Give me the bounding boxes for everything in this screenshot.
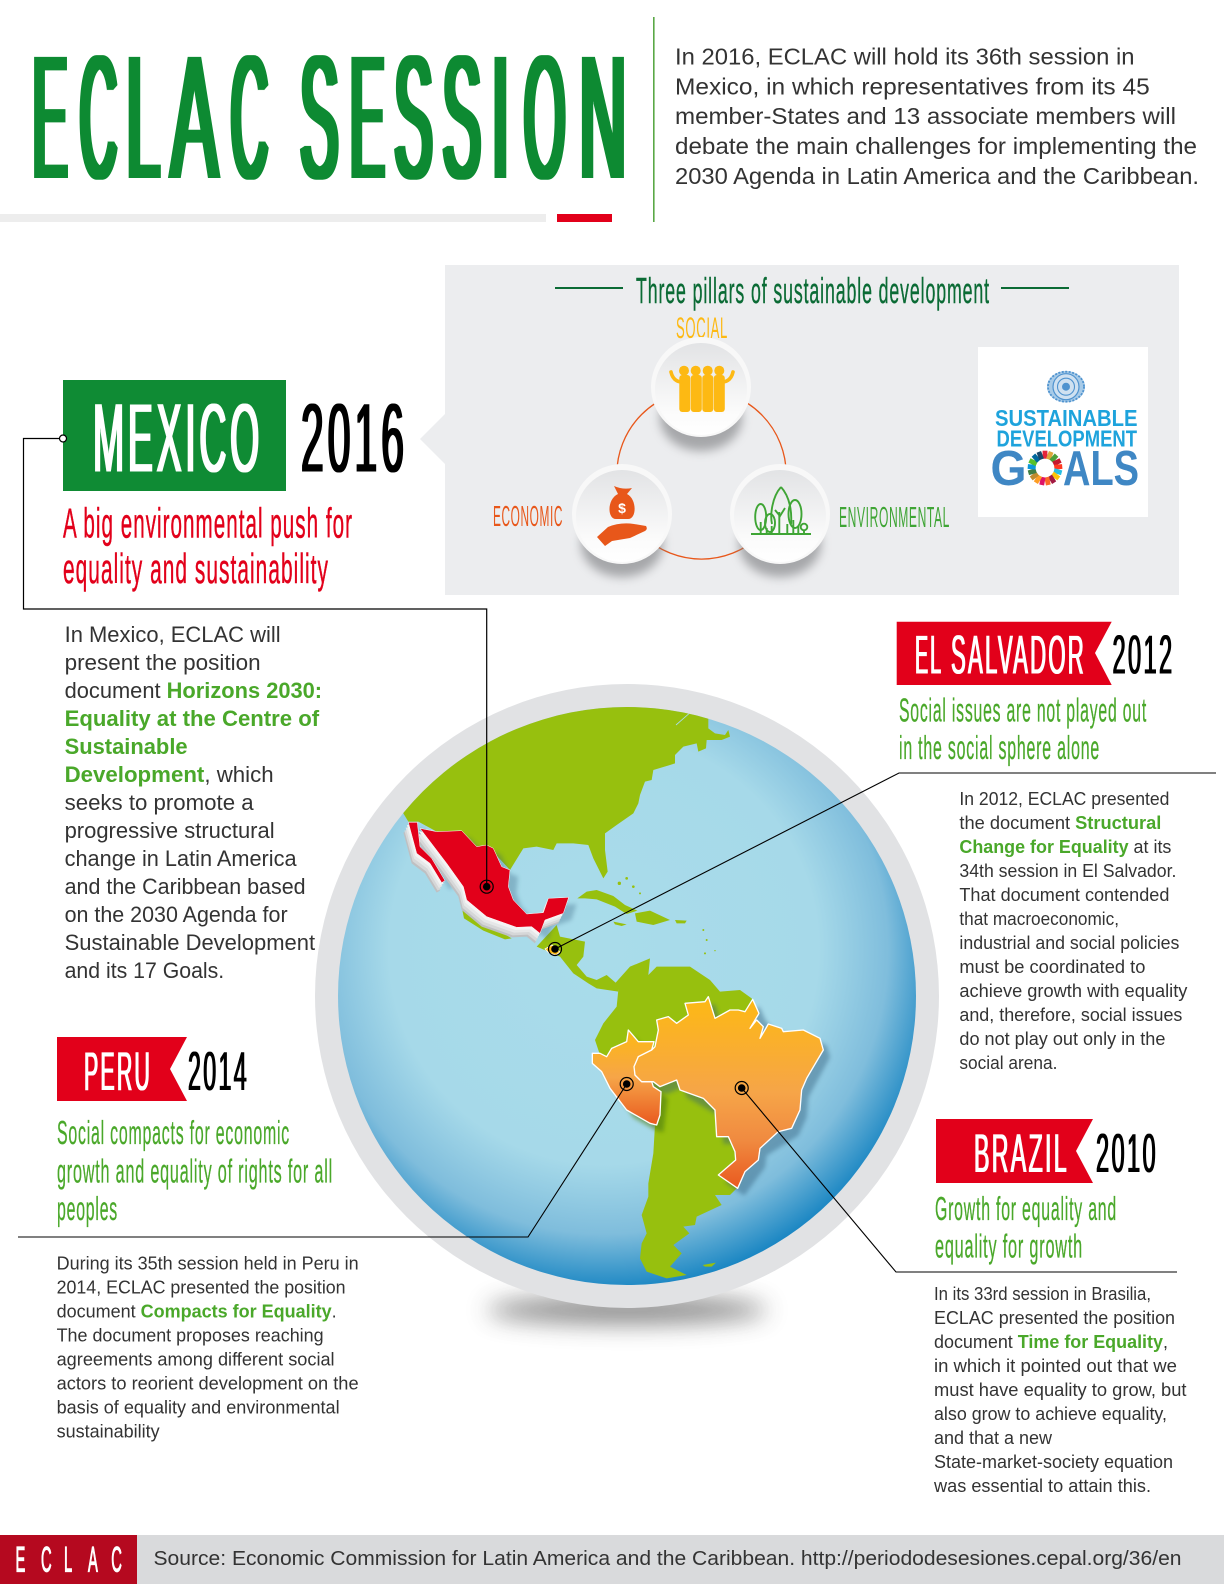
text: el salvador: must be coordinated to	[959, 957, 1145, 977]
text: el salvador: achieve growth with equality	[959, 981, 1187, 1001]
footer logo: ECLAC	[16, 1540, 122, 1580]
logo: sustainable development goals	[978, 347, 1148, 517]
intro text: debate the main challenges for implementing the	[675, 133, 1197, 159]
logo: sustainable development goals: G	[990, 442, 1026, 496]
footer	[0, 1535, 1224, 1584]
subheading: peru	[57, 1114, 333, 1227]
text: brazil: also grow to achieve equality,	[934, 1404, 1167, 1424]
map shadows	[642, 1004, 830, 1196]
text: el salvador	[959, 789, 1187, 1073]
pillar: environmental	[730, 464, 950, 577]
text: el salvador: industrial and social policies	[959, 933, 1179, 953]
heading: mexico	[63, 380, 408, 492]
title: S	[300, 20, 338, 216]
title: S	[443, 20, 481, 216]
title: E	[33, 20, 67, 216]
connector: peru	[18, 1078, 633, 1237]
globe	[315, 684, 939, 1324]
text: el salvador: social arena.	[959, 1053, 1057, 1073]
text: el salvador: 34th session in El Salvador.	[959, 861, 1176, 881]
icon: people	[671, 366, 733, 412]
heading: el salvador: EL	[915, 624, 943, 686]
text: mexico: and the Caribbean based	[65, 874, 306, 899]
pillar: social	[651, 312, 751, 451]
text: mexico: Sustainable Development	[65, 930, 315, 955]
title: L	[127, 20, 160, 216]
text: el salvador: the document Structural	[959, 813, 1161, 833]
text: peru: document Compacts for Equality.	[57, 1302, 337, 1322]
source line: Source: Economic Commission for Latin America and the Caribbean. http://periododesesiones.cepal.org/36/en	[154, 1548, 1182, 1570]
text: peru: During its 35th session held in Peru in	[57, 1254, 359, 1274]
heading: el salvador	[897, 622, 1174, 686]
connector: mexico	[24, 435, 493, 893]
text: A big environmental push for	[63, 500, 353, 547]
pillar: economic	[493, 464, 672, 577]
text: mexico: Development, which	[65, 762, 274, 787]
intro text: In 2016, ECLAC will hold its 36th session in	[675, 44, 1134, 70]
pillars ring	[617, 390, 786, 559]
text: el salvador: that macroeconomic,	[959, 909, 1119, 929]
text: brazil: document Time for Equality,	[934, 1332, 1168, 1352]
logo: sustainable development goals: SUSTAINABLE	[995, 405, 1138, 431]
text: mexico: document Horizons 2030:	[65, 678, 322, 703]
text: mexico: Sustainable	[65, 734, 188, 759]
text: mexico: progressive structural	[65, 818, 275, 843]
text: peru: actors to reorient development on the	[57, 1374, 359, 1394]
title: O	[524, 20, 565, 216]
text: brazil: was essential to attain this.	[933, 1476, 1151, 1496]
connector: el salvador	[548, 773, 1216, 956]
title: I	[492, 20, 509, 216]
icon: SDG colour wheel	[1028, 451, 1062, 485]
text: brazil: State-market-society equation	[934, 1452, 1173, 1472]
text: mexico: Equality at the Centre of	[65, 706, 320, 731]
text: peru: 2014, ECLAC presented the position	[57, 1278, 346, 1298]
text: peru: sustainability	[57, 1422, 160, 1442]
text: peru: basis of equality and environmental	[57, 1398, 340, 1418]
header rule	[0, 17, 655, 222]
text: brazil: and that a new	[934, 1428, 1053, 1448]
text: mexico: change in Latin America	[65, 846, 297, 871]
subheading: mexico: equality and sustainability	[63, 545, 329, 592]
title: E	[350, 20, 384, 216]
text: mexico: on the 2030 Agenda for	[65, 902, 288, 927]
icon: trees	[751, 487, 811, 534]
text: peru: The document proposes reaching	[57, 1326, 324, 1346]
text: brazil: in which it pointed out that we	[934, 1356, 1177, 1376]
panel: three pillars	[420, 265, 1179, 595]
heading: mexico: MEXICO	[93, 384, 263, 492]
text: brazil: ECLAC presented the position	[934, 1308, 1175, 1328]
text: el salvador: In 2012, ECLAC presented	[959, 789, 1169, 809]
map: mexico	[403, 822, 577, 943]
text: 2014	[188, 1040, 249, 1102]
panel: three pillars: ENVIRONMENTAL	[839, 502, 950, 534]
text: mexico: In Mexico, ECLAC will	[65, 622, 281, 647]
subheading: peru: peoples	[57, 1190, 118, 1227]
text: brazil	[933, 1284, 1186, 1496]
subheading: el salvador	[899, 692, 1147, 766]
title: A	[171, 20, 218, 216]
logo: sustainable development goals: DEVELOPMENT	[996, 426, 1137, 452]
intro text	[675, 44, 1199, 189]
title: C	[231, 20, 268, 216]
icon: UN emblem	[1047, 371, 1085, 402]
text: mexico: and its 17 Goals.	[65, 958, 224, 983]
text: growth and equality of rights for all	[57, 1152, 333, 1190]
map: el salvador	[545, 945, 560, 955]
text: el salvador: do not play out only in the	[959, 1029, 1165, 1049]
text: brazil: must have equality to grow, but	[934, 1380, 1186, 1400]
subheading: brazil	[935, 1190, 1117, 1264]
map: north america and caribbean	[403, 707, 730, 992]
text: mexico: present the position	[65, 650, 261, 675]
intro text: member-States and 13 associate members will	[675, 103, 1176, 129]
pillar: social: SOCIAL	[676, 312, 728, 345]
heading: brazil	[936, 1119, 1158, 1184]
title: S	[394, 20, 432, 216]
heading: brazil: BRAZIL	[974, 1122, 1069, 1184]
text: el salvador: and, therefore, social issues	[959, 1005, 1182, 1025]
text: brazil: In its 33rd session in Brasilia,	[934, 1284, 1151, 1304]
subheading: peru: Social compacts for economic	[57, 1114, 290, 1151]
text: peru	[57, 1254, 359, 1442]
intro text: Mexico, in which representatives from its 45	[675, 73, 1150, 99]
map: brazil	[634, 997, 823, 1188]
text: mexico: seeks to promote a	[65, 790, 254, 815]
text: peru: agreements among different social	[57, 1350, 335, 1370]
icon: money bag and hand	[597, 486, 647, 546]
map: americas	[373, 690, 830, 1278]
pillar: economic: ECONOMIC	[493, 501, 563, 533]
subheading: mexico	[63, 500, 353, 592]
text: el salvador: That document contended	[959, 885, 1169, 905]
connector: brazil	[735, 1082, 1177, 1272]
intro text: 2030 Agenda in Latin America and the Caribbean.	[675, 163, 1199, 189]
map: south america	[592, 958, 830, 1278]
text: N	[580, 20, 626, 216]
map: peru	[592, 1030, 661, 1125]
title: C	[80, 20, 117, 216]
logo: sustainable development goals: ALS	[1063, 442, 1139, 496]
heading: peru: PERU	[84, 1040, 152, 1102]
icon: money bag and hand: $	[618, 500, 626, 516]
text: 2016	[301, 384, 408, 492]
title	[33, 20, 626, 216]
text: mexico	[65, 622, 322, 983]
text: el salvador: Change for Equality at its	[959, 837, 1171, 857]
